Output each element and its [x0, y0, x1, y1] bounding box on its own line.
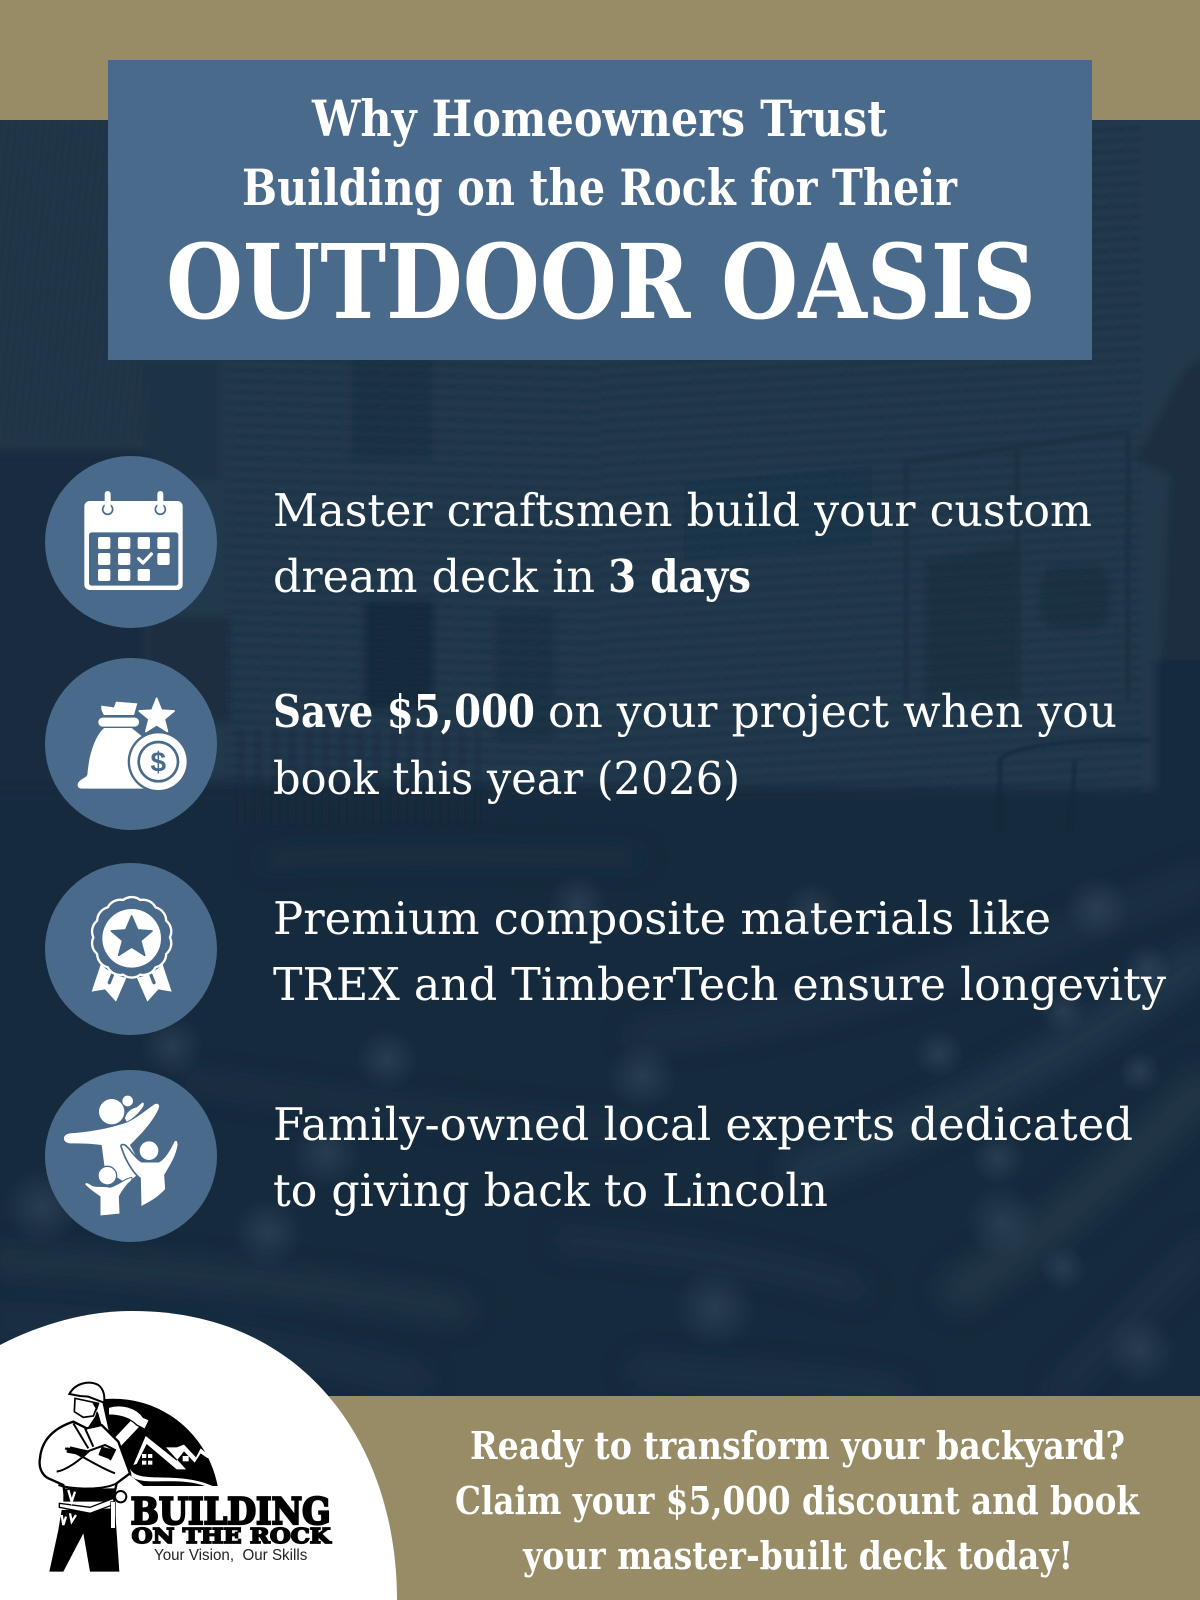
- text: item 3: [273, 892, 1167, 1011]
- logo wordmark: Your Vision, Our Skills: [154, 1547, 307, 1564]
- white logo panel: [0, 1311, 397, 1600]
- logo wordmark: ON THE ROCK: [132, 1524, 332, 1548]
- text: item 1: [273, 484, 1092, 603]
- logo dome with houses: [102, 1399, 218, 1486]
- bottom gold band: [300, 1396, 1200, 1600]
- top gold band: [0, 0, 1200, 120]
- text: item 2: [273, 685, 1117, 805]
- call to action text: Ready to transform your backyard?: [470, 1423, 1125, 1468]
- text: item 2: book this year (2026): [273, 752, 740, 805]
- logo worker figure: [40, 1383, 149, 1572]
- call to action text: [455, 1423, 1140, 1578]
- title line 1: Why Homeowners Trust: [311, 89, 887, 148]
- title line 3: OUTDOOR OASIS: [166, 222, 1036, 343]
- logo: Building on the Rock: [40, 1383, 332, 1572]
- icon: award rosette in circle: [45, 863, 217, 1035]
- icon: family in circle: [45, 1070, 217, 1242]
- text: item 4: to giving back to Lincoln: [273, 1164, 828, 1217]
- icon: money bag with star and coin in circle: $: [151, 747, 167, 778]
- text: item 4: [273, 1098, 1133, 1217]
- text: item 3: TREX and TimberTech ensure longevity: [273, 958, 1167, 1011]
- text: item 4: Family-owned local experts dedicated: [273, 1098, 1133, 1151]
- title panel: [108, 60, 1092, 360]
- title line 2: Building on the Rock for Their: [242, 158, 958, 217]
- icon: money bag with star and coin in circle: [45, 658, 217, 830]
- call to action text: your master-built deck today!: [522, 1533, 1073, 1578]
- text: item 1: Master craftsmen build your custom: [273, 484, 1092, 537]
- text: item 3: Premium composite materials like: [273, 892, 1051, 945]
- icon: calendar in circle: [45, 456, 217, 628]
- logo wordmark: BUILDING: [131, 1490, 331, 1533]
- text: item 1: dream deck in: [273, 550, 595, 603]
- logo wordmark: [131, 1490, 332, 1564]
- text: item 2: on your project when you: [548, 685, 1117, 738]
- text: item 2: Save $5,000: [273, 685, 535, 738]
- text: item 1: 3 days: [608, 550, 751, 603]
